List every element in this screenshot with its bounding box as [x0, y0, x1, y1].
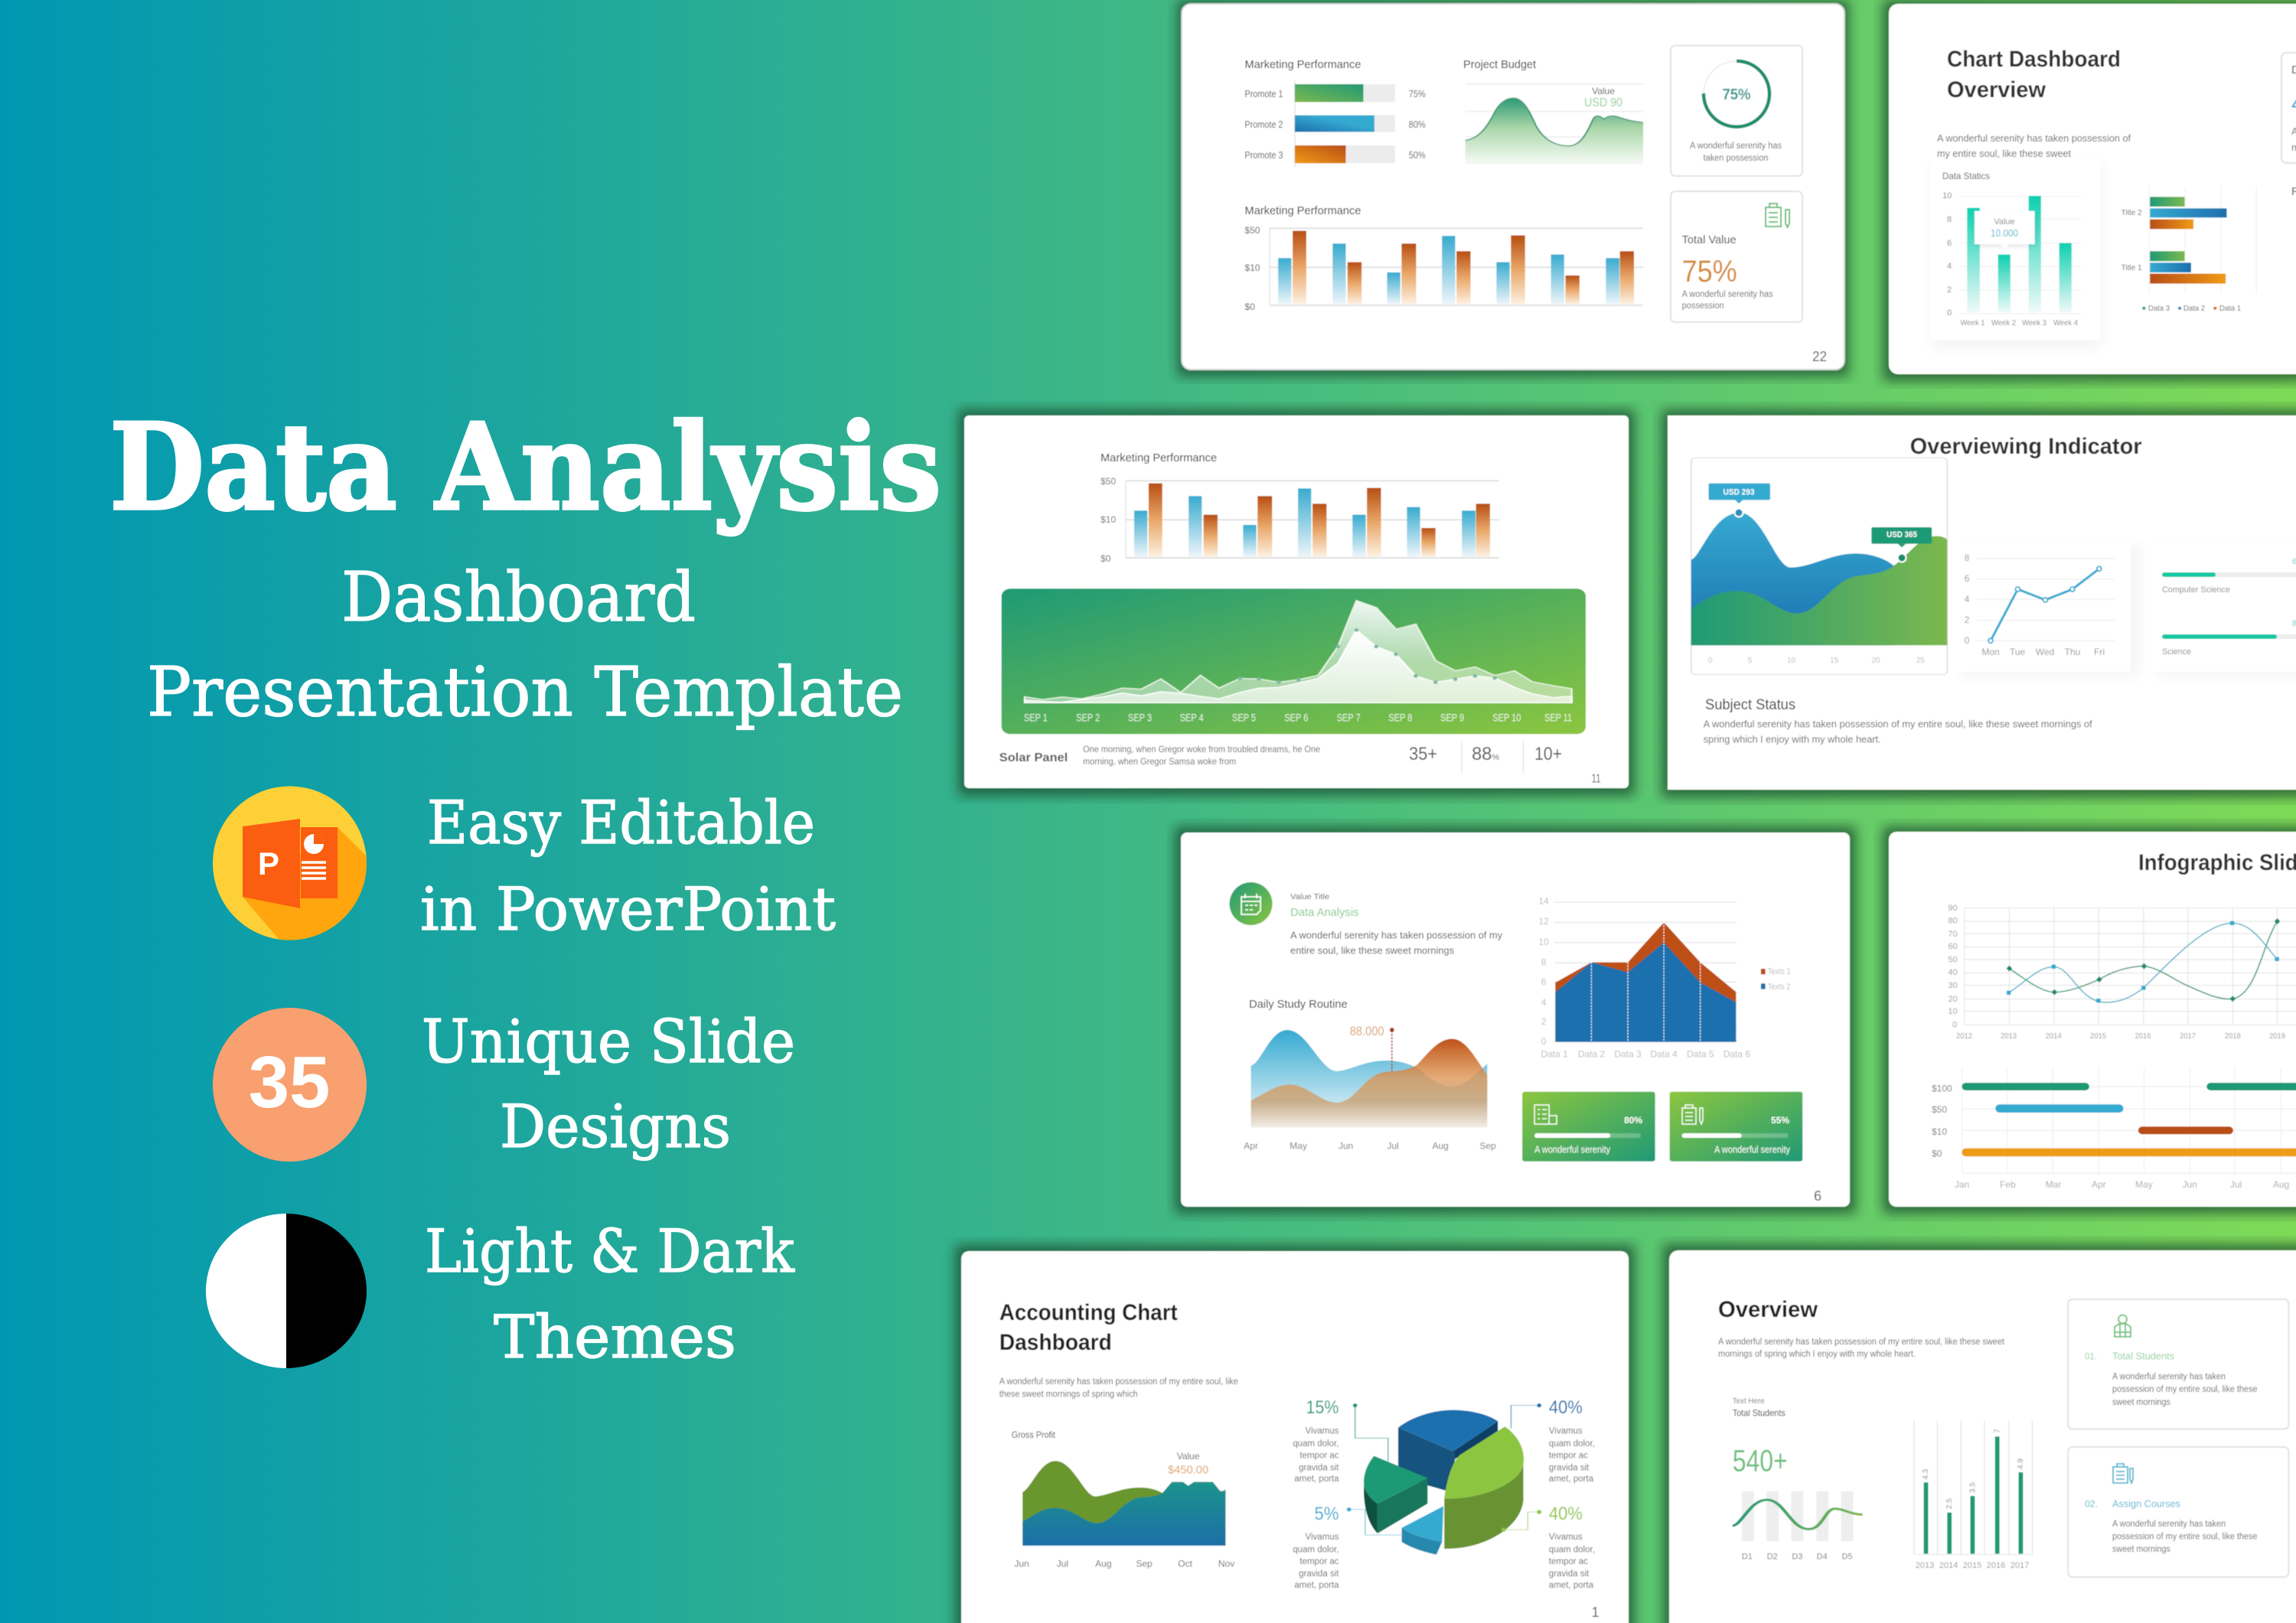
card: assign courses: 02.	[2085, 1498, 2098, 1509]
pie callouts left: gravida sit	[1299, 1464, 1339, 1473]
card: total students: 01.	[2085, 1351, 2097, 1362]
ring metric card: 75%	[1722, 86, 1751, 103]
3D pie chart	[1347, 1403, 1541, 1555]
line chart: 10	[1948, 1007, 1958, 1016]
total students sparkline: Text Here	[1733, 1396, 1765, 1406]
data statics bar chart: Value	[1994, 217, 2015, 227]
pie callouts right: 40%	[1549, 1504, 1583, 1524]
line chart card: Tue	[2010, 647, 2025, 657]
pie callouts left: quam dolor,	[1293, 1545, 1339, 1554]
green stat card 80 percent: 80%	[1624, 1115, 1642, 1126]
heading and description: A wonderful serenity has taken possession of my entire soul, like these sweet	[1718, 1338, 2005, 1347]
daily study routine area chart: Sep	[1479, 1141, 1496, 1152]
pie callouts right: quam dolor,	[1549, 1545, 1595, 1554]
pie callouts right: Vivamus	[1549, 1426, 1583, 1436]
panel: slide 11 solar panel	[958, 409, 1635, 796]
page number: 1	[1592, 1605, 1600, 1620]
description: A wonderful serenity has taken possession of my entire soul, like	[1000, 1377, 1238, 1387]
gantt chart: Aug	[2273, 1179, 2289, 1190]
heading and description	[1718, 1297, 2005, 1359]
card: assign courses: Assign Courses	[2112, 1498, 2180, 1509]
vertical bar chart: 2016	[1987, 1561, 2005, 1570]
gantt chart: $0	[1932, 1149, 1942, 1159]
marketing bar chart: Marketing Performance	[1101, 451, 1217, 464]
data statics bar chart: 10	[1942, 191, 1952, 200]
layered area chart card: 20	[1871, 657, 1880, 665]
pie callouts left: Vivamus	[1306, 1533, 1339, 1542]
feature text: unique slide designs	[422, 1008, 795, 1162]
stacked area chart: Data 4	[1650, 1049, 1678, 1060]
green stat card 55 percent: A wonderful serenity	[1714, 1145, 1791, 1155]
stacked area chart: Data 3	[1614, 1049, 1642, 1060]
stacked area chart: 10	[1538, 937, 1549, 947]
daily study routine area chart: 88.000	[1350, 1024, 1384, 1038]
progress card: Science	[2162, 647, 2191, 657]
line chart: 2018	[2225, 1031, 2241, 1041]
line chart: 2014	[2046, 1031, 2062, 1041]
feature text: easy editable: Easy Editable	[427, 789, 815, 858]
vertical bar chart: 3.5	[1969, 1482, 1978, 1493]
stacked area chart: 6	[1541, 976, 1547, 987]
line chart: 30	[1948, 981, 1958, 990]
gross profit area chart: Oct	[1178, 1559, 1192, 1569]
solar panel footer: 10+	[1534, 744, 1562, 764]
stacked area chart: Texts 2	[1768, 983, 1791, 992]
gantt chart: Mar	[2046, 1179, 2061, 1190]
pie callouts left: gravida sit	[1299, 1569, 1339, 1579]
green stat card 55 percent: 55%	[1771, 1115, 1789, 1126]
page number: 6	[1814, 1188, 1821, 1204]
solar panel footer: morning, when Gregor Samsa woke from	[1083, 756, 1236, 767]
pie callouts right: tempor ac	[1549, 1452, 1588, 1461]
panel: chart dashboard overview slide	[1883, 0, 2296, 381]
slide labels: 50%	[1409, 150, 1426, 161]
vertical bar chart: 2013	[1916, 1561, 1934, 1570]
panel: slide 6 data analysis	[1175, 826, 1856, 1214]
line chart: 60	[1948, 942, 1958, 951]
slide labels: 22	[1812, 349, 1827, 364]
green area chart panel: SEP 8	[1388, 712, 1412, 724]
layered area chart card: USD 293	[1724, 488, 1754, 497]
marketing bar chart	[1101, 451, 1499, 564]
vertical bar chart: 2015	[1963, 1561, 1981, 1570]
stacked area chart: Texts 1	[1768, 967, 1791, 976]
total value card: Total Value	[1682, 234, 1737, 246]
pie callouts left: tempor ac	[1300, 1557, 1339, 1566]
heading and description: Overview	[1718, 1297, 1818, 1322]
line chart card: Thu	[2065, 647, 2080, 657]
description	[1937, 132, 2131, 159]
subject status text	[1704, 697, 2092, 745]
description: A wonderful serenity has taken possession of	[1937, 132, 2131, 144]
subject status text: spring which I enjoy with my whole heart.	[1704, 734, 1881, 745]
horizontal bar chart: Data 1	[2219, 304, 2241, 313]
slide labels: Promote 2	[1244, 119, 1283, 130]
slide labels: $0	[1244, 301, 1255, 312]
horizontal bar chart: Title 2	[2122, 208, 2142, 217]
daily study routine area chart: Aug	[1432, 1141, 1449, 1152]
layered area chart card: 15	[1830, 657, 1839, 665]
total value card	[1671, 191, 1802, 322]
green area chart panel: SEP 11	[1544, 712, 1572, 724]
gantt chart	[1932, 1067, 2296, 1190]
vertical bar chart: 2017	[2011, 1561, 2029, 1570]
slide labels: Promote 3	[1244, 150, 1283, 161]
green stat card 80 percent: A wonderful serenity	[1534, 1145, 1611, 1155]
pie callouts right: gravida sit	[1549, 1569, 1590, 1579]
data statics bar chart: Week 2	[1991, 319, 2016, 328]
data statics bar chart: 6	[1947, 239, 1952, 248]
slide labels: Value	[1592, 86, 1615, 96]
marketing bar chart	[1270, 228, 1643, 305]
line chart card: Wed	[2036, 647, 2054, 657]
stacked area chart: Data 1	[1541, 1049, 1568, 1060]
icon: light and dark half circle	[206, 1214, 367, 1368]
line chart: 40	[1948, 968, 1958, 977]
total students sparkline: 540+	[1733, 1445, 1788, 1478]
vertical bar chart: 4.9	[2017, 1458, 2025, 1469]
project budget area chart	[1466, 84, 1643, 163]
horizontal bar chart: Data 3	[2148, 304, 2170, 313]
feature text: light and dark themes: Light & Dark	[425, 1217, 795, 1286]
data statics bar chart: Week 1	[1961, 319, 1985, 328]
card: assign courses: A wonderful serenity has taken	[2112, 1520, 2226, 1529]
gantt chart: May	[2135, 1179, 2153, 1190]
subtitle	[147, 557, 903, 732]
vertical bar chart: 2.5	[1945, 1498, 1954, 1509]
green area chart panel: SEP 1	[1024, 712, 1048, 724]
solar panel footer: 88%	[1472, 744, 1499, 764]
panel: slide 22 marketing performance	[1177, 0, 1849, 376]
heading: Dashboard	[1000, 1330, 1112, 1355]
stacked area chart: 2	[1541, 1016, 1547, 1027]
gantt chart: $50	[1932, 1104, 1947, 1115]
vertical bar chart: 2014	[1939, 1561, 1958, 1570]
line chart: 50	[1948, 955, 1958, 964]
green area chart panel: SEP 10	[1492, 712, 1521, 724]
line chart: 2015	[2090, 1031, 2106, 1041]
solar panel footer: 11	[1592, 773, 1601, 786]
line chart card: 2	[1965, 614, 1970, 625]
heading: Overview	[1947, 77, 2047, 103]
stacked area chart: Data 6	[1724, 1049, 1750, 1060]
line chart: 2017	[2180, 1031, 2196, 1041]
gantt chart: $10	[1932, 1126, 1947, 1137]
pie callouts left: 5%	[1314, 1504, 1339, 1524]
line chart card: 8	[1965, 552, 1970, 563]
gross profit area chart	[1012, 1429, 1234, 1569]
line chart: 2013	[2001, 1031, 2017, 1041]
line chart	[1948, 904, 2296, 1041]
card: assign courses	[2068, 1447, 2288, 1577]
gross profit area chart: Jun	[1014, 1559, 1029, 1569]
panel: overviewing indicator slide	[1662, 409, 2296, 797]
pie callouts right: gravida sit	[1549, 1464, 1590, 1473]
slide labels: 75%	[1409, 89, 1426, 99]
gross profit area chart: Nov	[1218, 1559, 1234, 1569]
stacked area chart: 8	[1541, 957, 1547, 968]
subtitle: Presentation Template	[147, 652, 903, 732]
subject status text: A wonderful serenity has taken possession of my entire soul, like these sweet mornings of	[1704, 719, 2092, 730]
solar panel footer	[1000, 741, 1601, 786]
gantt chart: $100	[1932, 1084, 1952, 1094]
card: total students: A wonderful serenity has taken	[2112, 1373, 2226, 1382]
daily study routine area chart: Apr	[1244, 1141, 1258, 1152]
card: total students: possession of my entire soul, like these	[2112, 1385, 2258, 1394]
line chart card: Mon	[1981, 647, 2000, 657]
value title text: entire soul, like these sweet mornings	[1290, 945, 1454, 957]
panel: slide 1 accounting chart dashboard	[955, 1245, 1635, 1623]
pie callouts left: quam dolor,	[1293, 1439, 1339, 1449]
heading	[1000, 1300, 1178, 1355]
stacked area chart: Data 5	[1687, 1049, 1714, 1060]
gantt chart: Jan	[1955, 1179, 1969, 1190]
total students sparkline: D5	[1841, 1552, 1853, 1561]
cropped right card	[2281, 53, 2296, 198]
line chart: 2016	[2135, 1031, 2151, 1041]
stacked area chart	[1538, 896, 1791, 1060]
icon: calendar circle	[1229, 882, 1272, 925]
slide labels: USD 90	[1584, 96, 1623, 109]
line chart card: Fri	[2094, 647, 2105, 657]
pie callouts right: Vivamus	[1549, 1533, 1583, 1542]
gross profit area chart: Jul	[1057, 1559, 1068, 1569]
progress card: Computer Science	[2162, 585, 2230, 595]
gross profit area chart: Value	[1177, 1451, 1200, 1462]
total students sparkline: D2	[1767, 1552, 1778, 1561]
feature text: easy editable: in PowerPoint	[420, 875, 836, 944]
pie callouts right: amet, porta	[1549, 1475, 1594, 1484]
daily study routine area chart: Jul	[1387, 1141, 1399, 1152]
feature text: easy editable	[420, 789, 836, 944]
green area chart panel: SEP 7	[1337, 712, 1361, 724]
feature text: light and dark themes: Themes	[494, 1303, 736, 1372]
stacked area chart: 12	[1538, 916, 1549, 927]
total value card: A wonderful serenity has	[1682, 290, 1773, 299]
pie callouts left	[1293, 1397, 1339, 1590]
progress card	[2145, 540, 2296, 676]
green area chart panel: SEP 6	[1284, 712, 1308, 724]
data statics bar chart: 2	[1947, 285, 1952, 295]
green area chart panel: SEP 3	[1128, 712, 1152, 724]
data statics bar chart: Week 3	[2022, 319, 2047, 328]
data statics bar chart	[1930, 158, 2102, 347]
green stat card 55 percent	[1670, 1092, 1802, 1162]
data statics bar chart: Data Statics	[1942, 171, 1990, 181]
line chart: 80	[1948, 917, 1958, 926]
slide labels	[1244, 58, 1827, 364]
slide labels: 80%	[1409, 119, 1426, 130]
subtitle: Dashboard	[341, 557, 696, 637]
line chart: 2012	[1956, 1031, 1972, 1041]
line chart card	[1950, 540, 2140, 676]
green area chart panel: SEP 5	[1232, 712, 1256, 724]
value title text	[1290, 892, 1502, 957]
horizontal bar chart	[2122, 186, 2256, 313]
stacked area chart: 14	[1538, 896, 1549, 907]
subject status text: Subject Status	[1705, 697, 1795, 713]
line chart card: 0	[1965, 635, 1970, 646]
line chart card: 4	[1965, 594, 1970, 605]
line chart: 70	[1948, 930, 1958, 939]
green area chart panel	[1002, 588, 1586, 734]
feature text: unique slide designs: Unique Slide	[422, 1008, 795, 1077]
icon: 35 badge	[213, 1008, 367, 1162]
value title text: Data Analysis	[1290, 906, 1359, 919]
description: my entire soul, like these sweet	[1937, 148, 2071, 159]
heading: Accounting Chart	[1000, 1300, 1178, 1325]
total students sparkline: Total Students	[1733, 1408, 1786, 1419]
horizontal bar chart: Title 1	[2122, 263, 2142, 272]
line chart: 20	[1948, 995, 1958, 1004]
layered area chart card	[1691, 458, 1947, 675]
horizontal bar chart: Data 2	[2183, 304, 2205, 313]
pie callouts left: Vivamus	[1306, 1426, 1339, 1436]
icon: 35 badge: 35	[249, 1041, 330, 1123]
daily study routine area chart: Daily Study Routine	[1249, 998, 1348, 1011]
heading	[1947, 47, 2121, 103]
layered area chart card: 10	[1787, 657, 1795, 665]
data statics bar chart: 10.000	[1991, 227, 2018, 239]
marketing bar chart: $50	[1101, 476, 1116, 487]
data statics bar chart: 0	[1947, 308, 1952, 318]
gross profit area chart: Aug	[1095, 1559, 1111, 1569]
value title text: Value Title	[1290, 892, 1329, 901]
total value card: possession	[1682, 301, 1724, 311]
main title: Data Analysis	[109, 397, 941, 537]
stacked area chart: 0	[1541, 1036, 1547, 1047]
card: total students	[2068, 1299, 2288, 1429]
total students sparkline: D1	[1742, 1552, 1753, 1561]
vertical bar chart: 4.3	[1922, 1468, 1930, 1480]
description	[1000, 1377, 1238, 1400]
icon: PowerPoint badge	[213, 787, 367, 940]
slide labels: Marketing Performance	[1244, 204, 1361, 217]
slide labels: Marketing Performance	[1244, 58, 1361, 71]
data statics bar chart: 4	[1947, 262, 1952, 271]
green area chart panel: SEP 2	[1076, 712, 1100, 724]
total value card: 75%	[1682, 255, 1737, 288]
slide labels: $50	[1244, 225, 1261, 236]
gross profit area chart: $450.00	[1168, 1464, 1208, 1477]
pie callouts right: amet, porta	[1549, 1581, 1594, 1590]
solar panel footer: Solar Panel	[1000, 751, 1068, 764]
panel: overview slide	[1663, 1244, 2296, 1623]
layered area chart card: USD 365	[1887, 530, 1917, 539]
pie callouts right: tempor ac	[1549, 1557, 1588, 1566]
card: assign courses: sweet mornings	[2112, 1545, 2170, 1554]
total students sparkline: D4	[1817, 1552, 1828, 1561]
data statics bar chart: 8	[1947, 215, 1952, 224]
heading and description: mornings of spring which I enjoy with my whole heart.	[1718, 1350, 1916, 1359]
heading: Overviewing Indicator	[1910, 434, 2142, 459]
feature text: unique slide designs: Designs	[500, 1093, 731, 1162]
green area chart panel: SEP 4	[1180, 712, 1204, 724]
gross profit area chart: Gross Profit	[1012, 1429, 1055, 1440]
gantt chart: Feb	[2000, 1179, 2016, 1190]
line chart: 90	[1948, 904, 1958, 913]
value title text: A wonderful serenity has taken possession of my	[1290, 930, 1502, 941]
daily study routine area chart: May	[1290, 1141, 1307, 1152]
solar panel footer: One morning, when Gregor woke from troubled dreams, he One	[1083, 744, 1320, 754]
green stat card 80 percent	[1522, 1092, 1655, 1162]
gantt chart: Jun	[2183, 1179, 2197, 1190]
daily study routine area chart	[1244, 998, 1496, 1152]
ring metric card	[1671, 46, 1802, 176]
slide labels: Promote 1	[1244, 89, 1283, 99]
pie callouts left: tempor ac	[1300, 1452, 1339, 1461]
line chart: 0	[1952, 1020, 1957, 1029]
pie callouts right: quam dolor,	[1549, 1439, 1595, 1449]
gross profit area chart: Sep	[1136, 1559, 1153, 1569]
slide labels: Project Budget	[1463, 58, 1537, 71]
layered area chart card: 25	[1916, 657, 1925, 665]
progress bars	[1295, 80, 1395, 167]
ring metric card: taken possession	[1704, 154, 1768, 163]
line chart: 2019	[2269, 1031, 2285, 1041]
pie callouts right: 40%	[1549, 1397, 1583, 1418]
vertical bar chart: 7	[1993, 1429, 2001, 1433]
slide labels: $10	[1244, 262, 1261, 273]
ring metric card: A wonderful serenity has	[1690, 142, 1782, 151]
daily study routine area chart: Jun	[1339, 1141, 1353, 1152]
gantt chart: Jul	[2230, 1179, 2242, 1190]
layered area chart card: 5	[1748, 657, 1753, 665]
gantt chart: Apr	[2092, 1179, 2106, 1190]
panel: infographic slide	[1883, 826, 2296, 1214]
layered area chart card: 0	[1708, 657, 1713, 665]
heading: Chart Dashboard	[1947, 47, 2121, 72]
total students sparkline	[1733, 1396, 1863, 1561]
line chart card: 6	[1965, 573, 1970, 584]
card: assign courses: possession of my entire soul, like these	[2112, 1533, 2258, 1542]
feature text: light and dark themes	[425, 1217, 795, 1372]
solar panel footer: 35+	[1409, 744, 1437, 764]
total students sparkline: D3	[1792, 1552, 1802, 1561]
stacked area chart: Data 2	[1578, 1049, 1605, 1060]
card: total students: sweet mornings	[2112, 1398, 2170, 1407]
pie callouts left: amet, porta	[1294, 1475, 1339, 1484]
pie callouts right	[1549, 1397, 1595, 1590]
marketing bar chart: $0	[1101, 553, 1111, 564]
data statics bar chart: Week 4	[2053, 319, 2078, 328]
pie callouts left: 15%	[1306, 1397, 1339, 1418]
pie callouts left: amet, porta	[1294, 1581, 1339, 1590]
icon: PowerPoint badge: P	[258, 846, 279, 882]
green area chart panel: SEP 9	[1440, 712, 1464, 724]
marketing bar chart: $10	[1101, 514, 1116, 525]
stacked area chart: 4	[1541, 997, 1547, 1008]
vertical bar chart	[1914, 1421, 2032, 1570]
description: these sweet mornings of spring which	[1000, 1390, 1138, 1400]
card: total students: Total Students	[2112, 1351, 2174, 1362]
